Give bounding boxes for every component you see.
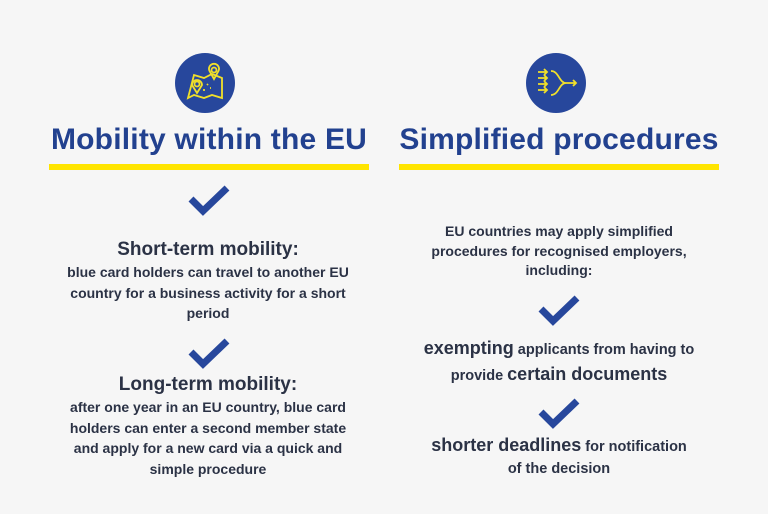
check 2 <box>188 338 230 369</box>
text: short-term mobility <box>67 239 349 321</box>
text: intro: including: <box>526 262 592 278</box>
text: intro: EU countries may apply simplified <box>445 223 673 239</box>
text: exempting <box>424 338 694 384</box>
text: short-term mobility: country for a business activity for a short <box>70 284 346 300</box>
text: long-term mobility: after one year in an EU country, blue card <box>70 399 346 415</box>
text: long-term mobility: simple procedure <box>150 460 266 476</box>
check 3 <box>538 296 580 326</box>
text: long-term mobility <box>70 374 346 477</box>
text: shorter deadlines: of the decision <box>508 461 610 477</box>
check 1 <box>188 186 230 216</box>
text: exempting: exempting applicants from having to <box>424 338 694 358</box>
icon: map <box>175 53 235 113</box>
text: short-term mobility: period <box>187 305 229 321</box>
text: short-term mobility: blue card holders can travel to another EU <box>67 264 349 280</box>
text: long-term mobility: Long-term mobility: <box>119 374 297 395</box>
text: exempting: provide certain documents <box>451 364 667 384</box>
text: short-term mobility: Short-term mobility: <box>117 239 299 260</box>
text: shorter deadlines: shorter deadlines for notification <box>431 435 687 455</box>
text: intro <box>431 223 687 278</box>
text: shorter deadlines <box>431 435 687 477</box>
title: Simplified procedures: Simplified procedures <box>399 123 719 156</box>
text: intro: procedures for recognised employers, <box>431 242 687 258</box>
title: Mobility within the EU: Mobility within the EU <box>51 123 367 156</box>
icon: merge arrows <box>526 53 586 113</box>
text: long-term mobility: holders can enter a second member state <box>70 420 346 436</box>
text: long-term mobility: and apply for a new card via a quick and <box>74 440 342 456</box>
check 4 <box>538 398 580 429</box>
